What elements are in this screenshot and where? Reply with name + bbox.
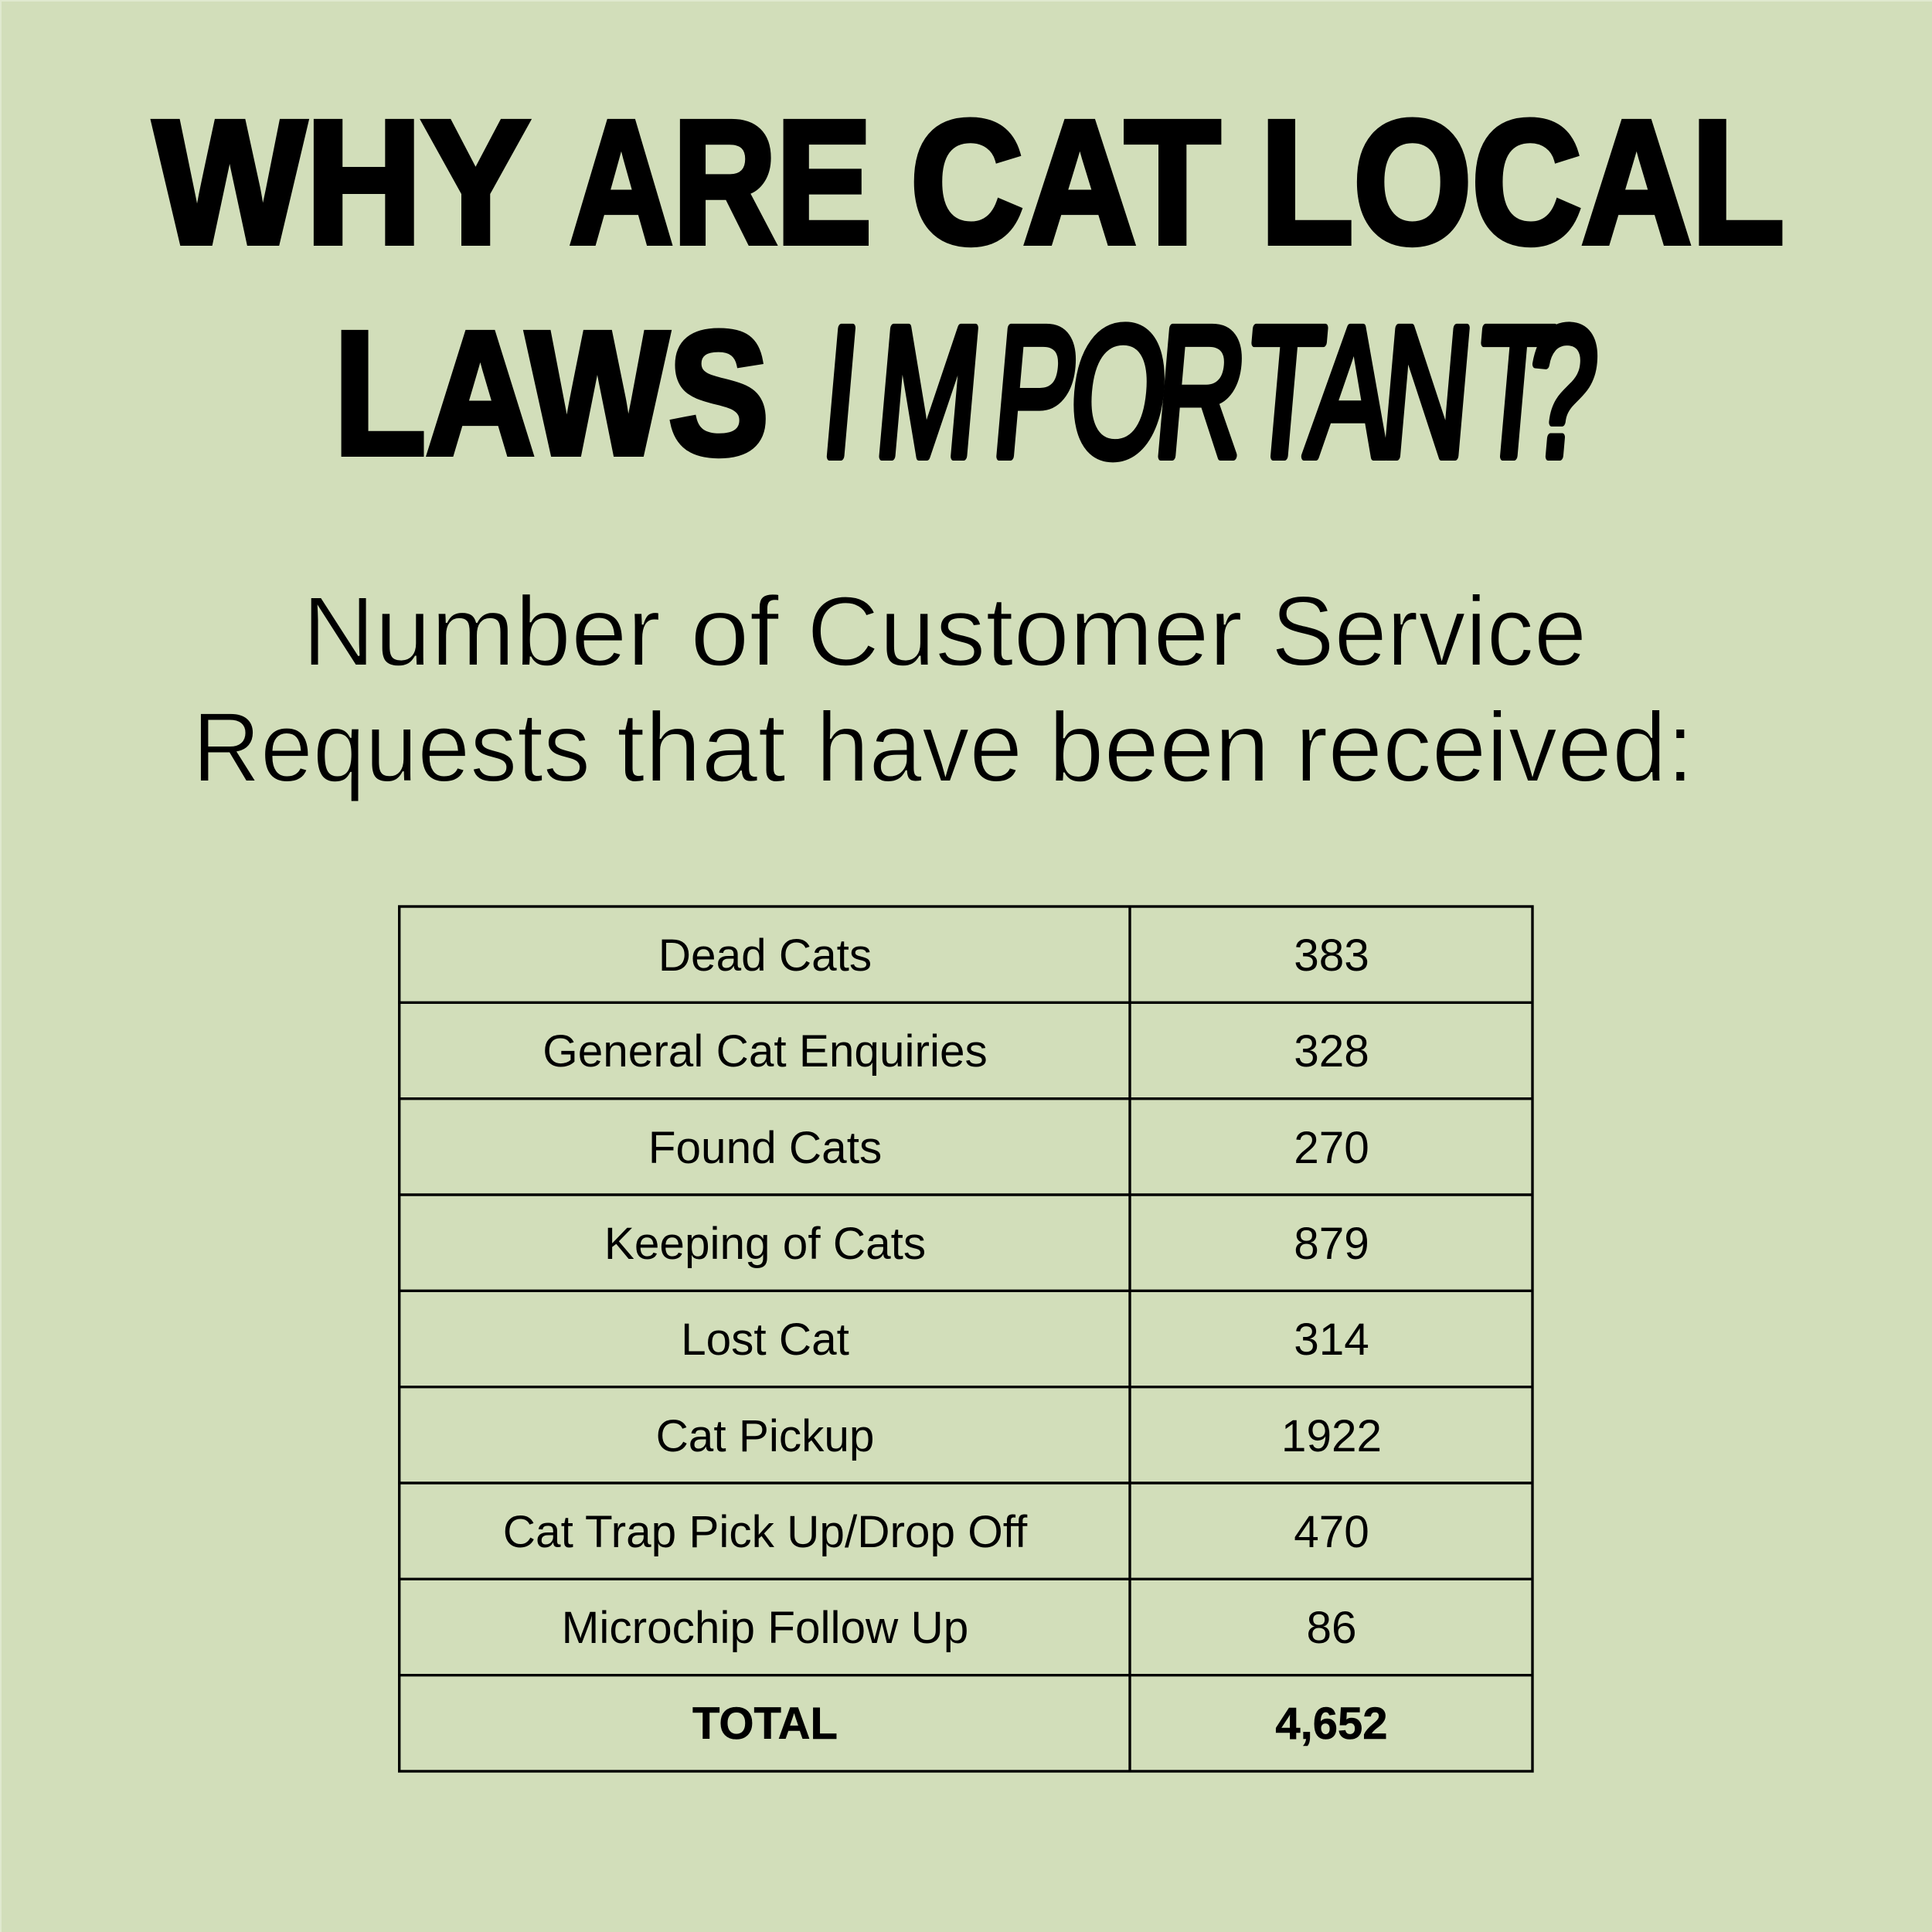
table grid [400, 906, 1532, 1771]
row: Cat Trap Pick Up/Drop Off [503, 1507, 1369, 1557]
row: Found Cats: 270 [1294, 1123, 1369, 1173]
row: Cat Trap Pick Up/Drop Off: 470 [1294, 1507, 1369, 1557]
row: TOTAL [692, 1699, 1388, 1749]
subtitle line 1: Customer [807, 577, 1243, 687]
row: Dead Cats [658, 930, 1369, 981]
subtitle line 1: of [690, 577, 779, 687]
row: Keeping of Cats: Keeping of Cats [604, 1219, 926, 1269]
subtitle line 2: have [816, 692, 1022, 803]
row: Microchip Follow Up: 86 [1306, 1603, 1357, 1653]
subtitle line 2: been [1049, 692, 1270, 803]
row: Lost Cat: Lost Cat [681, 1315, 849, 1365]
row: Cat Pickup: 1922 [1281, 1411, 1382, 1461]
row: Dead Cats: 383 [1294, 930, 1369, 981]
row: Dead Cats: Dead Cats [658, 930, 872, 981]
title line 2: IMPORTANT?: IMPORTANT? [815, 288, 1605, 496]
title line 1: ARE [570, 85, 872, 281]
title [154, 85, 1784, 496]
subtitle line 1 [302, 577, 1587, 687]
row: Lost Cat: 314 [1294, 1315, 1369, 1365]
title line 1: LOCAL [1260, 85, 1784, 281]
subtitle line 2: received: [1295, 692, 1694, 803]
subtitle line 1: Service [1271, 577, 1587, 687]
row: Keeping of Cats [604, 1219, 1369, 1269]
row: Cat Pickup [656, 1411, 1382, 1461]
title line 1: CAT [910, 85, 1220, 281]
row: Microchip Follow Up [562, 1603, 1357, 1653]
subtitle line 2 [192, 692, 1694, 803]
row: Microchip Follow Up: Microchip Follow Up [562, 1603, 968, 1653]
row: Cat Pickup: Cat Pickup [656, 1411, 874, 1461]
row: Lost Cat [681, 1315, 1369, 1365]
row: Found Cats: Found Cats [648, 1123, 882, 1173]
subtitle line 2: that [617, 692, 786, 803]
title line 2: LAWS: LAWS [334, 296, 769, 492]
row: Keeping of Cats: 879 [1294, 1219, 1369, 1269]
table [400, 906, 1532, 1771]
row: Found Cats [648, 1123, 1369, 1173]
row: TOTAL: TOTAL [692, 1699, 838, 1749]
title line 1: WHY [154, 85, 529, 281]
row: Cat Trap Pick Up/Drop Off: Cat Trap Pick Up/Drop Off [503, 1507, 1028, 1557]
subtitle line 1: Number [302, 577, 661, 687]
subtitle [192, 577, 1694, 803]
row: General Cat Enquiries [543, 1026, 1369, 1077]
title line 1 [154, 85, 1784, 281]
row: TOTAL: 4,652 [1275, 1699, 1388, 1749]
subtitle line 2: Requests [192, 692, 590, 803]
row: General Cat Enquiries: 328 [1294, 1026, 1369, 1077]
row: General Cat Enquiries: General Cat Enquiries [543, 1026, 988, 1077]
